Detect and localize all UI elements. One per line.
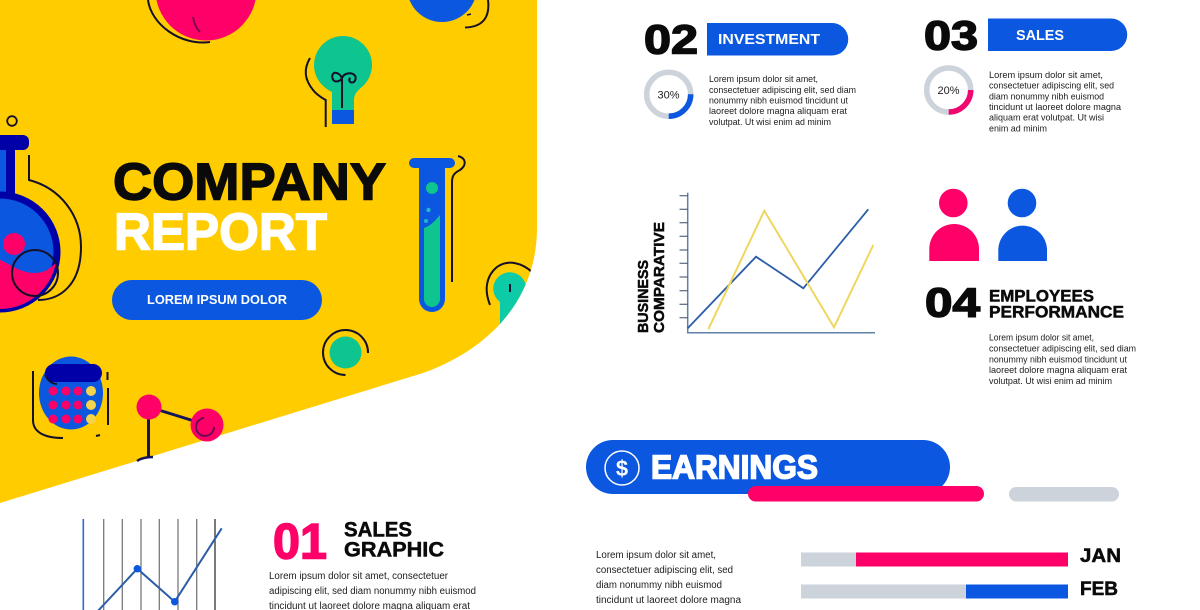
text: sales graphic body: [269, 571, 476, 610]
icon: teal bulb clipped by edge: [486, 262, 531, 324]
label: business comparative: [635, 222, 668, 333]
text: investment body: consectetuer adipiscing elit, sed diam: [709, 85, 856, 95]
panel: 04 employees performance: [925, 189, 1136, 386]
panel: yellow cover: [0, 0, 537, 503]
line: yellow series: [708, 211, 873, 329]
heading: sales graphic: [344, 518, 444, 562]
text: investment body: laoreet dolore magna aliquam erat: [709, 106, 847, 116]
heading: sales graphic: GRAPHIC: [344, 538, 444, 562]
text: employees body: consectetuer adipiscing elit, sed diam: [989, 344, 1136, 354]
icon: blue ball top: [407, 0, 488, 28]
text: investment body: [709, 74, 856, 127]
data points: [134, 565, 178, 605]
text: earnings body: [596, 550, 742, 606]
title: company report: COMPANY: [113, 154, 386, 212]
bar: pink accent: [748, 486, 984, 502]
bar: feb: FEB: [1080, 579, 1118, 600]
number 02: 02: [644, 16, 698, 62]
icon: green dot with ring: [323, 330, 368, 375]
label: business comparative: COMPARATIVE: [651, 222, 668, 333]
icon: molecule: [136, 394, 224, 461]
text: employees body: [989, 332, 1136, 386]
number 04: 04: [925, 280, 980, 326]
text: sales body: diam nonummy nibh euismod: [989, 91, 1104, 101]
text: employees body: Lorem ipsum dolor sit amet,: [989, 332, 1094, 342]
label: investment: [707, 23, 848, 56]
bar: jan: JAN: [1080, 546, 1121, 567]
title: company report: REPORT: [114, 204, 327, 262]
donut: 20%: 20%: [938, 85, 960, 97]
icon: flask: [0, 116, 81, 320]
text: sales graphic body: Lorem ipsum dolor sit amet, consectetuer: [269, 571, 449, 582]
donut: 20%: [927, 68, 971, 112]
bar: grey accent: [1009, 487, 1119, 502]
icon: pink ball top: [148, 0, 256, 42]
text: investment body: nonummy nibh euismod tincidunt ut: [709, 96, 848, 106]
banner: earnings: $: [616, 456, 628, 481]
text: earnings body: Lorem ipsum dolor sit amet,: [596, 550, 716, 561]
label: sales: [988, 18, 1127, 51]
text: employees body: nonummy nibh euismod tincidunt ut: [989, 354, 1127, 364]
text: investment body: volutpat. Ut wisi enim ad minim: [709, 117, 831, 127]
panel: 02 investment: [644, 16, 856, 127]
line series: [96, 528, 222, 610]
text: sales body: tincidunt ut laoreet dolore magna: [989, 102, 1122, 112]
icon: test tube: [409, 156, 465, 312]
chart: business comparative: [635, 193, 875, 333]
button: lorem ipsum dolor: LOREM IPSUM DOLOR: [147, 293, 287, 307]
heading: sales graphic: SALES: [344, 518, 412, 542]
donut: 30%: 30%: [658, 90, 680, 102]
button: lorem ipsum dolor: [112, 280, 322, 320]
text: sales body: enim ad minim: [989, 123, 1047, 133]
text: sales body: [989, 70, 1122, 133]
icon: light bulb: [306, 36, 372, 127]
donut: 30%: [647, 72, 691, 116]
bar: feb: [801, 579, 1118, 600]
heading: employees performance: PERFORMANCE: [989, 302, 1124, 322]
text: employees body: volutpat. Ut wisi enim ad minim: [989, 376, 1112, 386]
panel: 03 sales: [924, 12, 1127, 133]
text: earnings body: consectetuer adipiscing elit, sed: [596, 565, 733, 576]
line: blue series: [688, 209, 868, 328]
text: earnings body: diam nonummy nibh euismod: [596, 580, 722, 591]
label: investment: INVESTMENT: [718, 31, 820, 48]
icon: blue person: [998, 189, 1047, 261]
text: sales body: aliquam erat volutpat. Ut wisi: [989, 113, 1104, 123]
label: sales: SALES: [1016, 27, 1064, 44]
axis and ticks: [680, 193, 875, 333]
icon: pink person: [929, 189, 979, 261]
panel: earnings: [586, 440, 1121, 606]
text: sales graphic body: adipiscing elit, sed diam nonummy nibh euismod: [269, 586, 476, 597]
text: sales body: consectetuer adipiscing elit, sed: [989, 81, 1114, 91]
heading: employees performance: [989, 286, 1124, 322]
number 03: 03: [924, 12, 978, 58]
chart: sales graphic: [83, 519, 222, 610]
text: investment body: Lorem ipsum dolor sit amet,: [709, 74, 818, 84]
banner: earnings: [586, 440, 950, 494]
title: company report: [113, 154, 386, 262]
panel: 01 sales graphic: [269, 514, 476, 610]
bar: jan: [801, 546, 1121, 567]
text: employees body: laoreet dolore magna aliquam erat: [989, 365, 1127, 375]
grid lines: [83, 519, 215, 610]
icon: calculator: [33, 356, 108, 438]
text: sales body: Lorem ipsum dolor sit amet,: [989, 70, 1103, 80]
heading: employees performance: EMPLOYEES: [989, 286, 1094, 306]
text: earnings body: tincidunt ut laoreet dolore magna: [596, 595, 742, 606]
label: business comparative: BUSINESS: [635, 260, 652, 333]
number 01: 01: [273, 514, 327, 570]
banner: earnings: EARNINGS: [651, 448, 818, 486]
